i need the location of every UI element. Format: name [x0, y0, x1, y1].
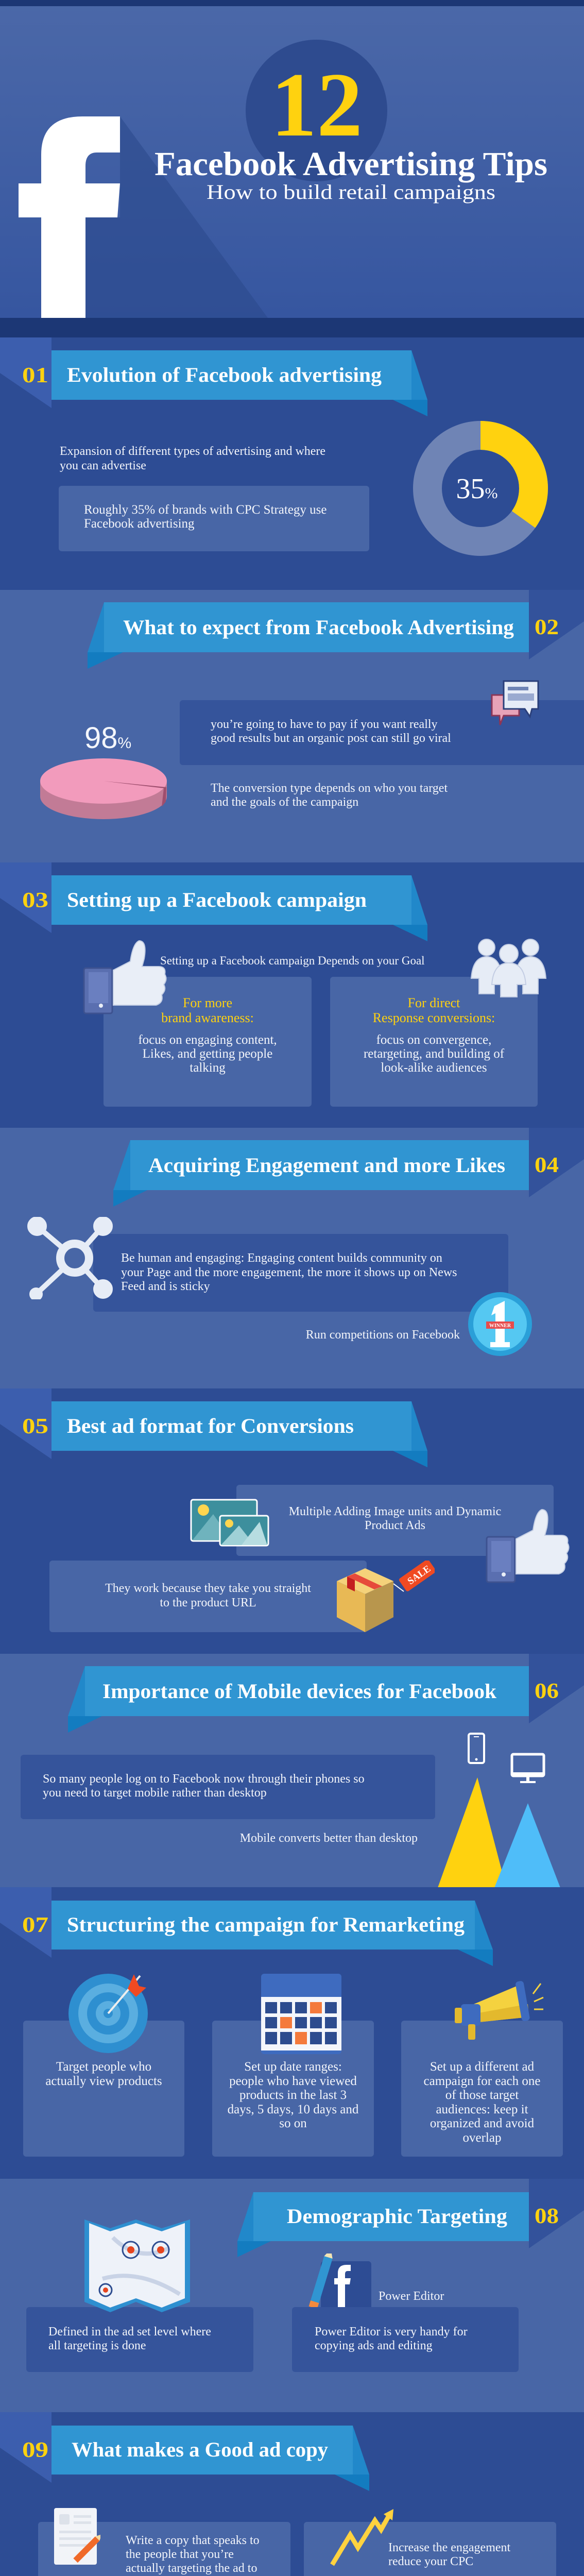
text: Write a copy that speaks to [126, 2534, 260, 2547]
icon: images [191, 1499, 269, 1547]
banner 07: 07 [22, 1913, 48, 1937]
heading [373, 995, 495, 1025]
section 08: demographic [0, 2179, 584, 2412]
text: Feed and is sticky [121, 1280, 210, 1293]
section 07: remarketing [0, 1887, 584, 2179]
text: the people that you’re [126, 2548, 234, 2561]
banner 08: Demographic Targeting [287, 2205, 507, 2228]
section 05: best ad format [0, 1388, 584, 1654]
banner 09: What makes a Good ad copy [72, 2438, 328, 2461]
banner 01: Evolution of Facebook advertising [67, 363, 382, 386]
text: you’re going to have to pay if you want really [211, 718, 438, 731]
box: phones [21, 1755, 435, 1819]
text: focus on convergence, [376, 1033, 491, 1047]
banner 07: Structuring the campaign for Remarketing [67, 1913, 465, 1936]
banner 04: 04 [535, 1154, 559, 1177]
text: Set up a different ad [430, 2060, 534, 2074]
banner 03: Setting up a Facebook campaign [67, 888, 367, 911]
chart: mobile vs desktop triangles [438, 1733, 560, 1887]
text: days, 5 days, 10 days and [228, 2102, 358, 2116]
box: product URL [49, 1561, 367, 1632]
banner 02: What to expect from Facebook Advertising [123, 616, 514, 639]
box: pay for results [180, 700, 584, 765]
donut chart 35% [413, 421, 548, 556]
header [0, 0, 584, 318]
banner 02 [88, 590, 584, 669]
banner 03: 03 [22, 889, 48, 912]
heading: For direct [408, 995, 460, 1010]
3d pie chart [40, 758, 167, 819]
text: audiences: keep it [436, 2102, 528, 2116]
text [211, 718, 451, 745]
icon: winner badge [468, 1292, 532, 1356]
text [43, 1772, 365, 1800]
banner 07 [0, 1887, 493, 1966]
text: people who have viewed [229, 2074, 357, 2088]
banner 08: 08 [535, 2205, 559, 2228]
text: expansion [60, 445, 325, 472]
text [121, 1251, 457, 1293]
text: to the product URL [160, 1596, 256, 1609]
banner 09: 09 [22, 2438, 48, 2462]
text: you need to target mobile rather than desktop [43, 1786, 267, 1800]
text: overlap [463, 2131, 501, 2144]
banner 05: 05 [22, 1415, 48, 1438]
box: 35% of brands [59, 486, 369, 551]
banner 01 [0, 337, 427, 416]
text: copying ads and editing [315, 2339, 433, 2352]
section 04: engagement [0, 1128, 584, 1388]
text [315, 2325, 468, 2353]
banner 05 [0, 1388, 427, 1467]
box: engagement [304, 2522, 556, 2576]
text: retargeting, and building of [364, 1047, 504, 1061]
banner 06 [68, 1654, 584, 1733]
icon: power editor pencil and f [305, 2253, 372, 2314]
box: brand awareness [104, 977, 312, 1107]
text: campaign for each one [424, 2074, 540, 2088]
section 06: mobile [0, 1654, 584, 1887]
header bottom band [0, 318, 584, 337]
text: organized and avoid [430, 2116, 534, 2130]
heading: Response conversions: [373, 1010, 495, 1025]
icon: box with sale tag [337, 1561, 435, 1632]
text [289, 1505, 501, 1532]
heading [161, 995, 254, 1025]
title circle [246, 40, 387, 181]
text: Be human and engaging: Engaging content builds community on [121, 1251, 442, 1265]
label: power editor: Power Editor [379, 2290, 444, 2303]
banner 04 [113, 1128, 584, 1207]
box: ad set level [26, 2307, 253, 2372]
banner 05: Best ad format for Conversions [67, 1414, 354, 1437]
box: separate campaigns [401, 2021, 563, 2157]
icon: winner badge: WINNER [489, 1323, 511, 1329]
banner 06: 06 [535, 1680, 559, 1703]
stat text: Facebook advertising [84, 517, 195, 531]
stat text: Roughly 35% of brands with CPC Strategy use [84, 503, 327, 517]
icon: facebook f logo with long shadow [19, 116, 268, 318]
text: expansion: you can advertise [60, 459, 146, 472]
text [48, 2325, 211, 2353]
icon: document with pencil [54, 2508, 100, 2566]
text: Set up date ranges: [244, 2060, 342, 2074]
subtitle: Setting up a Facebook campaign Depends on your Goal [160, 954, 425, 967]
title block: 12 [271, 54, 363, 156]
text [138, 1033, 277, 1075]
section 09: good ad copy [0, 2412, 584, 2576]
banner 01: 01 [22, 364, 48, 387]
stat 98%: 98% [84, 721, 131, 755]
text [105, 1582, 311, 1609]
text: reduce your CPC [388, 2555, 473, 2568]
icon: zigzag growth arrow [330, 2509, 396, 2567]
box: target viewers [23, 2021, 184, 2157]
text [388, 2541, 510, 2569]
title block [154, 54, 547, 204]
icon: chat bubbles [491, 680, 539, 725]
text: Product Ads [365, 1519, 425, 1532]
text: actually targeting the ad to [126, 2562, 257, 2575]
box: speaks to targets [38, 2522, 290, 2576]
banner 04: Acquiring Engagement and more Likes [148, 1154, 505, 1177]
icon: calendar [261, 1974, 341, 2054]
text: They work because they take you straight [105, 1582, 311, 1595]
text: focus on engaging content, [138, 1033, 277, 1047]
text [45, 2060, 162, 2088]
icon: megaphone [455, 1981, 544, 2040]
text: Increase the engagement [388, 2541, 510, 2554]
icon: network [27, 1217, 113, 1299]
icon: people [471, 939, 547, 997]
banner 02: 02 [535, 616, 559, 639]
box: direct response [330, 977, 538, 1107]
text: run competitions: Run competitions on Facebook [306, 1328, 460, 1342]
text: Multiple Adding Image units and Dynamic [289, 1505, 501, 1518]
text: Power Editor is very handy for [315, 2325, 468, 2338]
text: talking [190, 1061, 226, 1075]
stat text [84, 503, 327, 531]
section 02: what to expect [0, 590, 584, 862]
text: conversion type [211, 782, 448, 809]
text: look-alike audiences [381, 1061, 487, 1075]
text [424, 2060, 540, 2144]
banner 06: Importance of Mobile devices for Facebook [102, 1680, 497, 1703]
text: conversion type: The conversion type depends on who you target [211, 782, 448, 795]
banner 03 [0, 862, 427, 941]
icon: target [68, 1974, 148, 2053]
box: image units [236, 1485, 554, 1556]
title block: Facebook Advertising Tips [154, 145, 547, 183]
text: conversion type: and the goals of the campaign [211, 795, 358, 809]
text [126, 2534, 260, 2575]
text: Likes, and getting people [143, 1047, 272, 1061]
donut chart 35%: 35% [456, 473, 497, 505]
text: Defined in the ad set level where [48, 2325, 211, 2338]
text [228, 2060, 358, 2130]
text: So many people log on to Facebook now through their phones so [43, 1772, 365, 1786]
text: so on [279, 2116, 307, 2130]
heading: For more [183, 995, 232, 1010]
text: all targeting is done [48, 2339, 146, 2352]
text: expansion: Expansion of different types of advertising and where [60, 445, 325, 458]
section 01: evolution [0, 337, 584, 590]
text: Target people who [56, 2060, 151, 2074]
top bar [0, 0, 584, 6]
box: be human [93, 1234, 508, 1312]
title block: How to build retail campaigns [207, 180, 495, 204]
box: date ranges [212, 2021, 374, 2157]
text: actually view products [45, 2074, 162, 2088]
text: good results but an organic post can still go viral [211, 732, 451, 745]
text: mobile converts: Mobile converts better than desktop [240, 1832, 418, 1845]
heading: brand awareness: [161, 1010, 254, 1025]
text: your Page and the more engagement, the more it shows up on News [121, 1265, 457, 1279]
icon: thumbs up [83, 940, 167, 1014]
banner 08 [237, 2179, 584, 2257]
text [364, 1033, 505, 1075]
icon: map with targets [82, 2217, 193, 2315]
icon: box with sale tag: SALE [406, 1564, 433, 1587]
box: power editor [292, 2307, 519, 2372]
icon: thumbs up [486, 1509, 570, 1583]
text: products in the last 3 [239, 2088, 347, 2102]
text: of those target [445, 2088, 519, 2102]
section 03: setting up [0, 862, 584, 1128]
banner 09 [0, 2412, 584, 2495]
